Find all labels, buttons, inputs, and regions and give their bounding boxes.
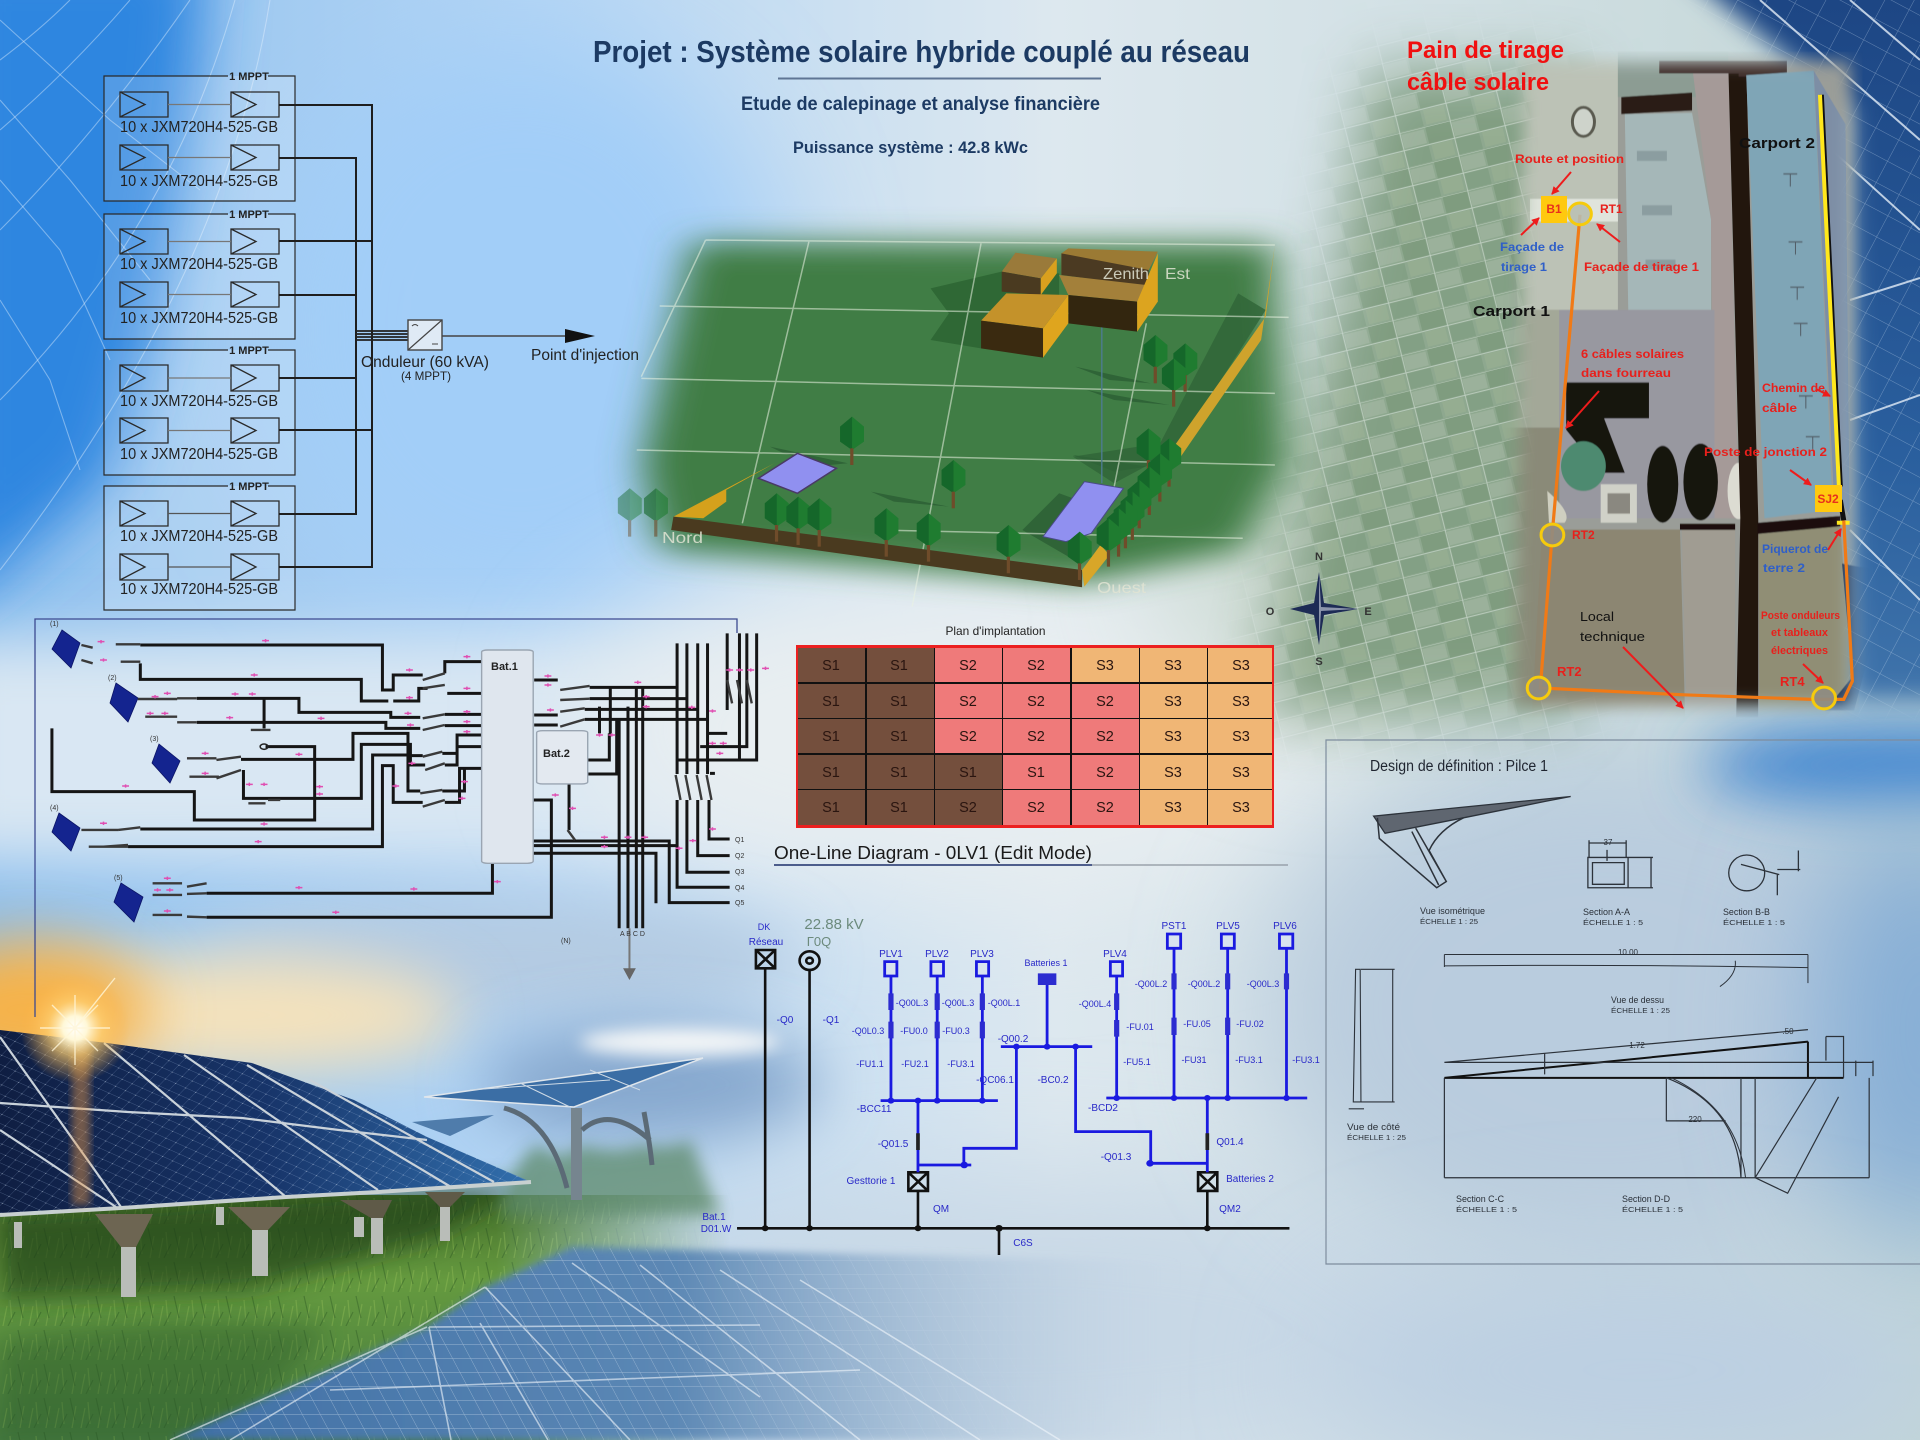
table cell labels: S2 xyxy=(1027,729,1045,745)
one-line labels: -Q00L.3 xyxy=(1247,979,1279,989)
second carport with trees xyxy=(412,1058,720,1215)
subtitle: Etude de calepinage et analyse financière xyxy=(741,94,1100,115)
one-line labels: PLV2 xyxy=(925,949,949,960)
dimension labels: .50 xyxy=(1782,1027,1794,1036)
table cell labels: S1 xyxy=(822,800,840,816)
schematic: PV, batteries and switchgear: Q5 xyxy=(735,900,744,907)
MPPT group 3: 1 MPPT xyxy=(229,345,269,357)
schematic: PV, batteries and switchgear xyxy=(35,619,769,1017)
MPPT group 3: 10 x JXM720H4-525-GB xyxy=(120,446,278,463)
one-line labels: C6S xyxy=(1013,1238,1033,1249)
MPPT group 3 xyxy=(104,345,295,475)
one-line labels: PLV4 xyxy=(1103,949,1127,960)
table cell labels: S3 xyxy=(1164,729,1182,745)
MPPT group 3: 10 x JXM720H4-525-GB xyxy=(120,393,278,410)
map annotations red: RT1 xyxy=(1600,202,1623,216)
drawing frame xyxy=(1326,740,1920,1264)
schematic: PV, batteries and switchgear: Q1 xyxy=(735,837,744,844)
grass field xyxy=(0,1182,800,1440)
table cell labels: S1 xyxy=(890,765,908,781)
table cell labels xyxy=(822,658,1250,816)
MPPT group 1: 10 x JXM720H4-525-GB xyxy=(120,173,278,190)
view captions: ÉCHELLE 1 : 5 xyxy=(1456,1205,1517,1214)
inverter labels: (4 MPPT) xyxy=(401,369,451,383)
orientation labels: Nord xyxy=(662,530,703,547)
aerial site photo xyxy=(1507,52,1862,717)
view captions: ÉCHELLE 1 : 5 xyxy=(1723,918,1785,927)
orientation labels: Ouest xyxy=(1097,580,1147,597)
one-line labels: -BCD2 xyxy=(1088,1103,1118,1114)
cable routes and pull points xyxy=(1527,95,1852,709)
inverter labels xyxy=(361,354,489,383)
map annotations red: Route et position xyxy=(1515,152,1624,166)
table cell labels: S2 xyxy=(1027,694,1045,710)
table cell labels: S2 xyxy=(1096,800,1114,816)
one-line labels: -FU31 xyxy=(1181,1055,1207,1065)
table cell labels: S3 xyxy=(1096,658,1114,674)
compass rose: S xyxy=(1315,656,1323,668)
one-line circuit xyxy=(737,934,1307,1255)
MPPT group 2: 1 MPPT xyxy=(229,209,269,221)
map annotations red: RT2 xyxy=(1572,528,1595,542)
schematic labels xyxy=(491,661,570,760)
schematic: PV, batteries and switchgear: Q4 xyxy=(735,885,744,892)
drawing heading: Design de définition : Pilce 1 xyxy=(1370,758,1548,775)
view captions: Section D-D xyxy=(1622,1194,1670,1204)
junction box labels: SJ2 xyxy=(1817,492,1839,506)
section views xyxy=(1588,840,1800,895)
view captions: ÉCHELLE 1 : 5 xyxy=(1583,918,1643,927)
table cell labels: S2 xyxy=(959,800,977,816)
table cell labels: S1 xyxy=(890,729,908,745)
aerial cable routing plan xyxy=(1407,37,1890,727)
one-line labels: -QC06.1 xyxy=(976,1075,1014,1086)
solar arrays xyxy=(758,453,836,493)
background: solar panels top right xyxy=(1688,0,1920,715)
view captions xyxy=(1347,906,1785,1214)
compass rose: E xyxy=(1364,606,1372,618)
one-line labels: -FU5.1 xyxy=(1123,1057,1151,1067)
drawing views xyxy=(1349,796,1873,1193)
view captions: Section B-B xyxy=(1723,907,1770,917)
table cell labels: S2 xyxy=(959,694,977,710)
orientation labels: Zenith xyxy=(1103,266,1149,283)
sun xyxy=(20,973,130,1083)
one-line labels: -Q00L.2 xyxy=(1135,979,1167,989)
schematic frame line xyxy=(35,619,737,1017)
table cell labels: S3 xyxy=(1164,765,1182,781)
title rule xyxy=(778,78,1101,80)
table cell labels: S3 xyxy=(1232,694,1250,710)
inverter xyxy=(408,320,442,350)
MPPT group 4 xyxy=(104,481,295,610)
one-line labels: Bat.1 xyxy=(702,1212,726,1223)
one-line labels: Réseau xyxy=(749,937,783,948)
table cell labels: S3 xyxy=(1164,694,1182,710)
white projection grid xyxy=(637,240,1289,607)
one-line labels: -Q00L.4 xyxy=(1079,999,1111,1009)
view captions: ÉCHELLE 1 : 25 xyxy=(1611,1006,1670,1015)
view captions: Vue de côté xyxy=(1347,1122,1400,1132)
one-line labels: -FU0.3 xyxy=(942,1026,970,1036)
polarity marks xyxy=(98,639,769,914)
side view xyxy=(1349,969,1395,1109)
diagram: PV strings to inverter xyxy=(104,71,639,610)
one-line labels: 22.88 kV xyxy=(804,916,864,933)
table cell labels: S1 xyxy=(822,658,840,674)
view captions: Vue de dessu xyxy=(1611,995,1664,1005)
layout table: plan d'implantation xyxy=(796,624,1274,828)
injection point label: Point d'injection xyxy=(531,347,639,364)
buildings xyxy=(1061,248,1158,275)
one-line labels: QM xyxy=(933,1204,949,1215)
map annotations red: Poste de jonction 2 xyxy=(1704,445,1827,459)
one-line labels: QM2 xyxy=(1219,1204,1241,1215)
dimension labels xyxy=(1604,838,1794,1124)
view captions: ÉCHELLE 1 : 25 xyxy=(1420,917,1478,926)
table cell labels: S1 xyxy=(822,694,840,710)
view captions: Section C-C xyxy=(1456,1194,1504,1204)
wiring xyxy=(52,633,769,980)
one-line diagram xyxy=(701,843,1320,1255)
MPPT group 2 xyxy=(104,209,295,339)
junction box labels: B1 xyxy=(1546,202,1562,216)
isometric view xyxy=(1374,796,1571,888)
view captions: Vue isométrique xyxy=(1420,906,1485,916)
schematic: PV, batteries and switchgear: (N) xyxy=(561,938,571,945)
one-line labels: -Q00L.2 xyxy=(1188,979,1220,989)
MPPT group 1: 10 x JXM720H4-525-GB xyxy=(120,119,278,136)
map annotations blue: Façade de xyxy=(1500,240,1564,254)
schematic: PV, batteries and switchgear: (2) xyxy=(108,675,117,682)
map annotations black: Local xyxy=(1580,609,1614,624)
one-line labels: -FU.01 xyxy=(1126,1022,1154,1032)
one-line heading: One-Line Diagram - 0LV1 (Edit Mode) xyxy=(774,843,1092,863)
table cell labels: S1 xyxy=(890,694,908,710)
dimension labels: 220 xyxy=(1688,1115,1702,1124)
top view xyxy=(1444,955,1808,987)
table cell labels: S3 xyxy=(1232,729,1250,745)
title: Projet : Système solaire hybride couplé au réseau xyxy=(593,34,1250,69)
dimension labels: 10.00 xyxy=(1618,948,1639,957)
one-line labels: -FU3.1 xyxy=(1292,1055,1320,1065)
one-line labels: -FU1.1 xyxy=(856,1059,884,1069)
main panel array xyxy=(0,1030,531,1215)
MPPT group 4: 10 x JXM720H4-525-GB xyxy=(120,581,278,598)
title block xyxy=(593,34,1250,157)
schematic labels: Bat.2 xyxy=(543,748,570,760)
table cell labels: S1 xyxy=(890,658,908,674)
one-line labels: -FU3.1 xyxy=(947,1059,975,1069)
one-line labels: -FU.02 xyxy=(1236,1019,1264,1029)
one-line labels: -Q0 xyxy=(777,1015,794,1026)
one-line labels: -Q01.5 xyxy=(878,1139,909,1150)
batteries xyxy=(482,650,533,863)
dimension labels: 37 xyxy=(1604,838,1613,847)
schematic: PV, batteries and switchgear: (1) xyxy=(50,621,59,628)
map annotations red: 6 câbles solaires xyxy=(1581,347,1684,361)
map annotations blue xyxy=(1500,240,1828,575)
map annotations black: Carport 2 xyxy=(1739,135,1815,152)
output arrow xyxy=(442,329,595,343)
one-line labels: -Q00L.3 xyxy=(942,998,974,1008)
map heading: câble solaire xyxy=(1407,69,1549,96)
PV panel icons xyxy=(52,630,180,922)
map annotations red: et tableaux xyxy=(1771,627,1829,639)
table cell labels: S3 xyxy=(1164,658,1182,674)
trees xyxy=(618,335,1197,580)
orientation labels xyxy=(662,266,1191,597)
dimension labels: 1.72 xyxy=(1629,1041,1645,1050)
table cell labels: S3 xyxy=(1232,765,1250,781)
compass rose: N xyxy=(1315,551,1323,563)
DC bus wires xyxy=(279,105,372,567)
schematic: PV, batteries and switchgear: Q3 xyxy=(735,869,744,876)
table cell labels: S3 xyxy=(1232,658,1250,674)
map annotations black: technique xyxy=(1580,629,1645,644)
schematic: PV, batteries and switchgear: (3) xyxy=(150,736,159,743)
table cell labels: S2 xyxy=(1096,694,1114,710)
one-line labels: PLV6 xyxy=(1273,921,1297,932)
walls xyxy=(1174,245,1275,460)
one-line labels: -FU0.0 xyxy=(900,1026,928,1036)
table cell labels: S2 xyxy=(1096,765,1114,781)
one-line labels: -FU3.1 xyxy=(1235,1055,1263,1065)
table cell labels: S2 xyxy=(1096,729,1114,745)
one-line labels: PLV3 xyxy=(970,949,994,960)
compass rose: O xyxy=(1266,606,1275,618)
one-line labels: PST1 xyxy=(1161,921,1187,932)
inverter input bundle xyxy=(356,331,408,340)
junction box labels xyxy=(1546,202,1839,506)
table cell labels: S1 xyxy=(822,765,840,781)
map annotations black: Carport 1 xyxy=(1473,303,1550,320)
table caption: Plan d'implantation xyxy=(946,624,1046,638)
one-line labels: Gesttorie 1 xyxy=(847,1176,896,1187)
schematic: PV, batteries and switchgear: A B C D xyxy=(620,931,645,938)
schematic labels: Bat.1 xyxy=(491,661,518,673)
compass rose xyxy=(1266,551,1372,668)
map annotations black xyxy=(1473,135,1815,644)
view captions: ÉCHELLE 1 : 5 xyxy=(1622,1205,1683,1214)
map annotations red xyxy=(1515,152,1840,689)
MPPT group 2: 10 x JXM720H4-525-GB xyxy=(120,256,278,273)
map annotations red: dans fourreau xyxy=(1581,366,1671,380)
one-line labels: PLV1 xyxy=(879,949,903,960)
one-line labels: -BCC11 xyxy=(857,1104,892,1115)
table cell labels: S2 xyxy=(959,729,977,745)
background: perspective grid lines top-left xyxy=(0,0,270,570)
map annotations red: Poste onduleurs xyxy=(1761,610,1840,622)
junction boxes xyxy=(1541,196,1842,512)
one-line labels: -Q00L.3 xyxy=(896,998,928,1008)
one-line labels: Batteries 1 xyxy=(1024,958,1068,968)
map annotations red: Chemin de xyxy=(1762,381,1825,395)
one-line labels: -Q01.3 xyxy=(1101,1152,1132,1163)
one-line labels: -Q1 xyxy=(823,1015,840,1026)
mechanical drawing: carport design xyxy=(1326,740,1920,1264)
posts xyxy=(14,1192,465,1297)
site ground and buildings xyxy=(618,240,1289,607)
system power: Puissance système : 42.8 kWc xyxy=(793,139,1028,157)
one-line labels: -BC0.2 xyxy=(1037,1075,1069,1086)
map heading xyxy=(1407,37,1564,96)
one-line labels: D01.W xyxy=(701,1224,732,1235)
map annotations red: RT2 xyxy=(1557,664,1582,679)
section front view xyxy=(1444,1030,1873,1193)
view captions: ÉCHELLE 1 : 25 xyxy=(1347,1133,1406,1142)
map annotations blue: Piquerot de xyxy=(1762,542,1828,556)
MPPT group 1: 1 MPPT xyxy=(229,71,269,83)
table grid xyxy=(796,645,1274,828)
one-line labels: Γ0Q xyxy=(807,934,831,949)
one-line labels: Q01.4 xyxy=(1216,1137,1244,1148)
table cell labels: S1 xyxy=(959,765,977,781)
table cell labels: S2 xyxy=(1027,800,1045,816)
map annotations red: câble xyxy=(1762,401,1797,415)
map annotations red: Façade de tirage 1 xyxy=(1584,260,1699,274)
MPPT group 4: 10 x JXM720H4-525-GB xyxy=(120,528,278,545)
inverter labels: Onduleur (60 kVA) xyxy=(361,354,489,371)
one-line labels: -FU2.1 xyxy=(901,1059,929,1069)
map annotations blue: terre 2 xyxy=(1763,561,1805,575)
table cell labels: S2 xyxy=(959,658,977,674)
schematic: PV, batteries and switchgear: (5) xyxy=(114,875,123,882)
one-line labels: -Q00L.1 xyxy=(988,998,1020,1008)
table cell labels: S3 xyxy=(1232,800,1250,816)
map heading: Pain de tirage xyxy=(1407,37,1564,64)
MPPT group 2: 10 x JXM720H4-525-GB xyxy=(120,310,278,327)
table cell labels: S1 xyxy=(822,729,840,745)
one-line labels: Batteries 2 xyxy=(1226,1174,1274,1185)
schematic: PV, batteries and switchgear: Q2 xyxy=(735,853,744,860)
orientation labels: Est xyxy=(1165,266,1191,283)
MPPT group 4: 1 MPPT xyxy=(229,481,269,493)
map annotations red: RT4 xyxy=(1780,674,1805,689)
photo: solar array in grass xyxy=(0,973,800,1440)
one-line labels: PLV5 xyxy=(1216,921,1240,932)
map annotations red: électriques xyxy=(1771,645,1828,657)
view captions: Section A-A xyxy=(1583,907,1630,917)
3D site model xyxy=(618,240,1289,607)
one-line labels: DK xyxy=(758,922,770,932)
red arrows xyxy=(1521,172,1841,708)
table cell labels: S1 xyxy=(1027,765,1045,781)
map annotations blue: tirage 1 xyxy=(1501,260,1547,274)
one-line labels: -FU.05 xyxy=(1183,1019,1211,1029)
table cell labels: S2 xyxy=(1027,658,1045,674)
background: blueprint solar grid bottom centre xyxy=(170,1247,1180,1440)
one-line labels: -Q00.2 xyxy=(998,1034,1029,1045)
one-line labels: -Q0L0.3 xyxy=(852,1026,884,1036)
background: aerial farmland xyxy=(1232,30,1604,757)
table cell labels: S1 xyxy=(890,800,908,816)
one-line labels xyxy=(701,916,1320,1249)
schematic: PV, batteries and switchgear: (4) xyxy=(50,805,59,812)
MPPT group 1 xyxy=(104,71,295,201)
table cell labels: S3 xyxy=(1164,800,1182,816)
